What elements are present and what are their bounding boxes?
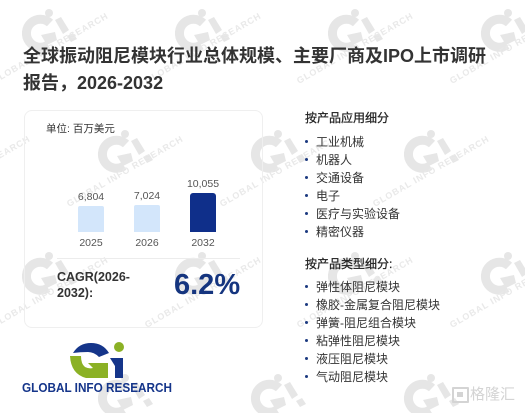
bar chart: 2026: [135, 237, 159, 249]
unit label: 单位: 百万美元: [46, 123, 115, 135]
title: [23, 46, 486, 93]
title: 报告，2026-2032: [23, 73, 163, 93]
list: applications: 工业机械: [316, 135, 364, 149]
heading: by application: 按产品应用细分: [305, 111, 389, 125]
watermark pattern: GLOBAL INFO RESEARCH: [143, 11, 262, 86]
list: types: 橡胶-金属复合阻尼模块: [316, 298, 440, 312]
watermark pattern: GLOBAL INFO RESEARCH: [143, 255, 262, 330]
watermark pattern: GLOBAL INFO RESEARCH: [295, 255, 414, 330]
list: types: 气动阻尼模块: [316, 370, 388, 384]
divider: [57, 258, 240, 259]
heading: by type: 按产品类型细分:: [305, 257, 392, 271]
watermark pattern: GLOBAL INFO RESEARCH: [371, 134, 490, 209]
list: types: 液压阻尼模块: [316, 352, 388, 366]
list: types: 弹簧-阻尼组合模块: [316, 316, 416, 330]
watermark pattern: GLOBAL INFO RESEARCH: [295, 11, 414, 86]
bar chart: 7,024: [134, 190, 160, 202]
list: applications: 机器人: [316, 153, 352, 167]
title: 全球振动阻尼模块行业总体规模、主要厂商及IPO上市调研: [23, 46, 486, 66]
list: applications: 医疗与实验设备: [316, 207, 400, 221]
CAGR label: [57, 270, 130, 300]
watermark pattern: GLOBAL INFO RESEARCH: [218, 134, 337, 209]
list: applications: 电子: [316, 189, 340, 203]
CAGR label: 2032):: [57, 286, 93, 300]
list: applications: 交通设备: [316, 171, 364, 185]
list: applications: [305, 135, 400, 239]
list: types: 弹性体阻尼模块: [316, 280, 400, 294]
panel: market size card: [24, 110, 263, 328]
source watermark: Gelonghui: 格隆汇: [470, 386, 515, 403]
bar chart: 6,804: [78, 191, 104, 203]
logo: Global Info Research: GLOBAL INFO RESEARCH: [22, 381, 172, 395]
bar chart: 2032: [191, 237, 215, 249]
CAGR label: CAGR(2026-: [57, 270, 130, 284]
list: types: [305, 280, 440, 384]
CAGR value: 6.2%: [174, 269, 240, 301]
list: applications: 精密仪器: [316, 225, 364, 239]
bar chart: 2025: [79, 237, 103, 249]
list: types: 粘弹性阻尼模块: [316, 334, 400, 348]
watermark pattern: GLOBAL INFO RESEARCH: [65, 134, 184, 209]
bar chart: 10,055: [187, 178, 219, 190]
